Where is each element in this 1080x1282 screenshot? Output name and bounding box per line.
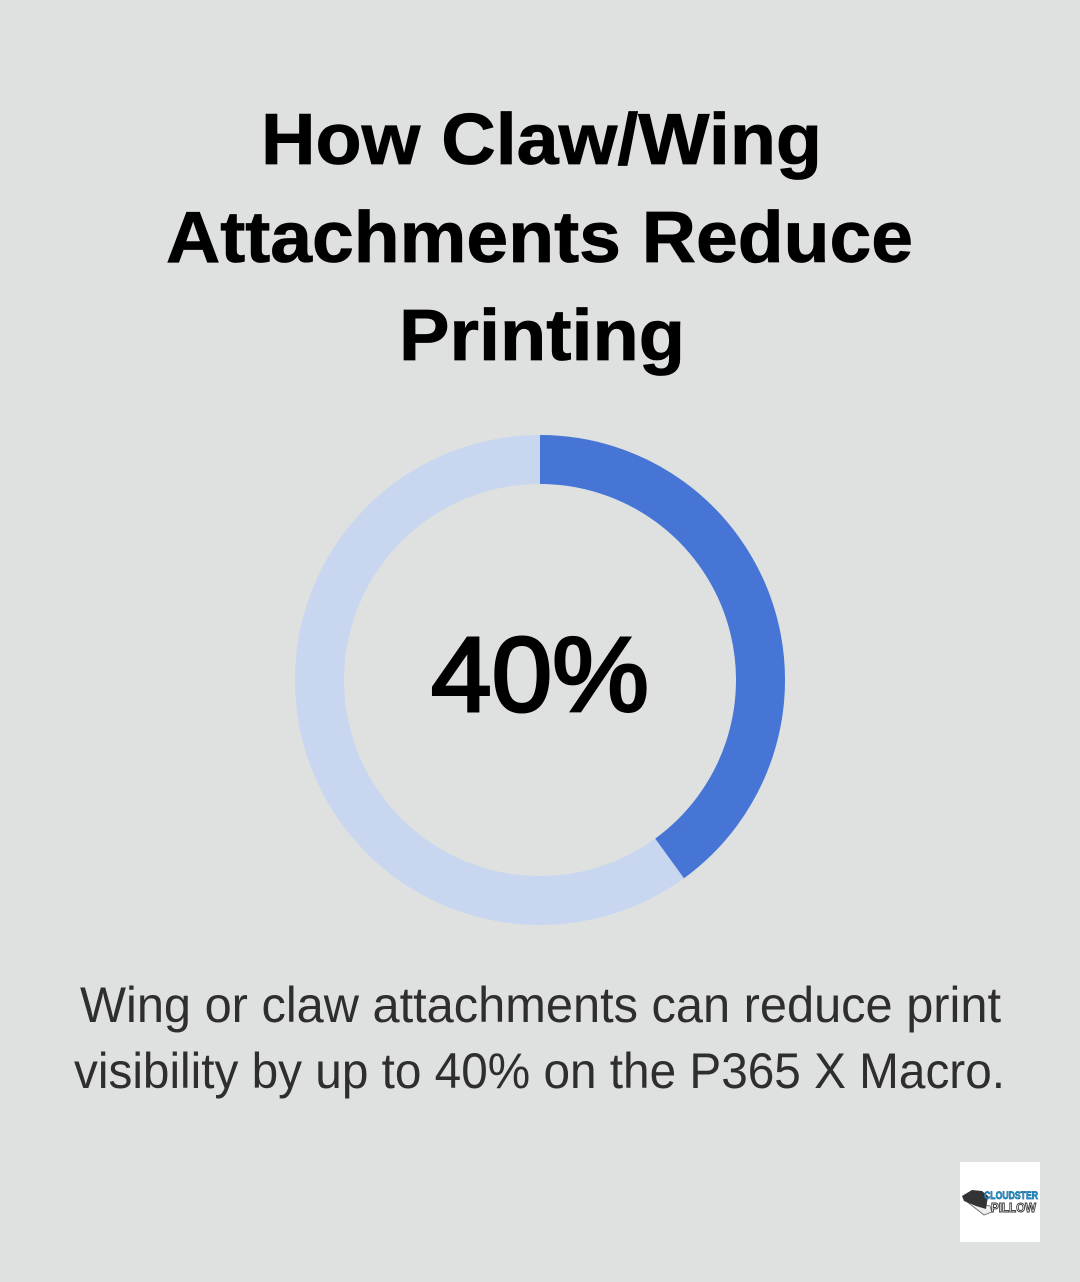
logo wordmark xyxy=(984,1190,1038,1215)
description text: Wing or claw attachments can reduce print xyxy=(80,977,1001,1033)
title: Printing xyxy=(399,296,685,376)
title xyxy=(166,100,913,376)
donut chart: 40 percent xyxy=(320,460,761,900)
logo icon: pillow xyxy=(962,1190,992,1215)
logo wordmark: PILLOW xyxy=(991,1200,1037,1215)
center value: 40% xyxy=(431,616,649,734)
description text: visibility by up to 40% on the P365 X Macro. xyxy=(74,1043,1005,1099)
description text xyxy=(74,977,1005,1099)
logo wordmark: CLOUDSTER xyxy=(984,1190,1038,1202)
logo: Cloudster Pillow xyxy=(960,1162,1040,1242)
title: How Claw/Wing xyxy=(261,100,822,180)
title: Attachments Reduce xyxy=(166,198,913,278)
